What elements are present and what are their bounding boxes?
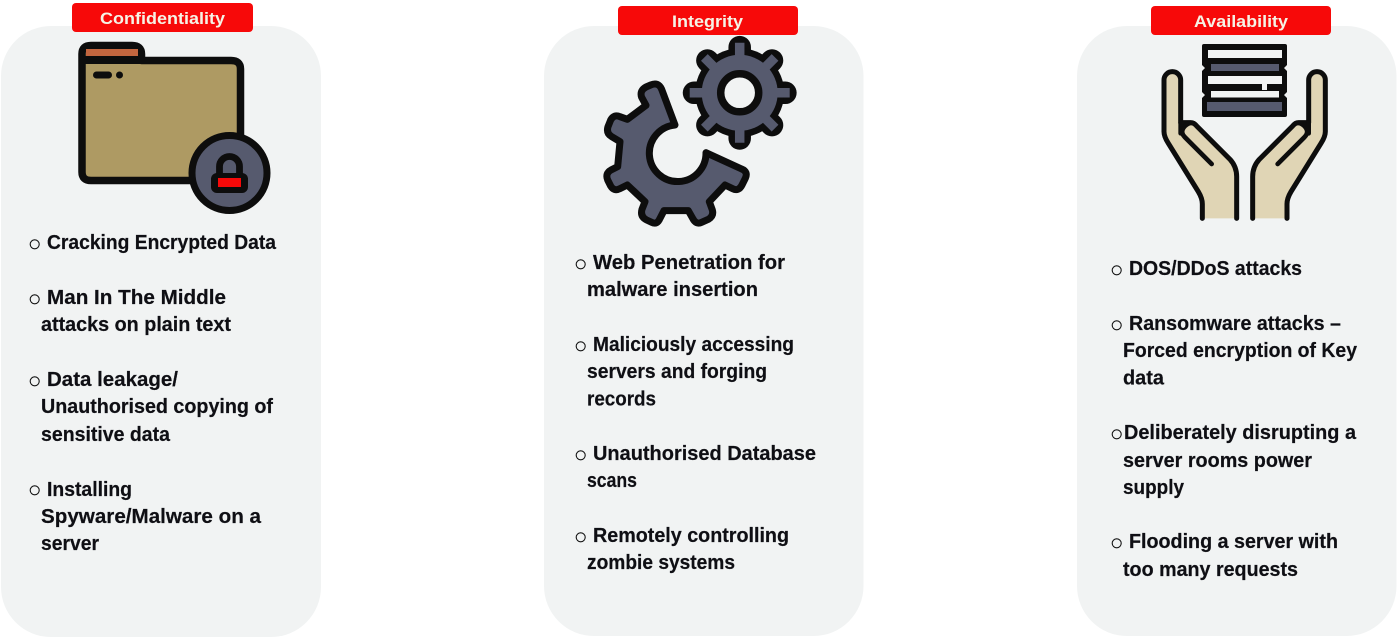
item: ransomware attacks: Forced encryption of Key xyxy=(1123,340,1358,362)
item: database scans: scans xyxy=(587,470,637,492)
item: zombie systems: Remotely controlling xyxy=(593,525,789,547)
item: ransomware attacks: Ransomware attacks – xyxy=(1129,313,1341,335)
list: confidentiality threats xyxy=(30,232,277,555)
item: disrupting power supply: server rooms power xyxy=(1123,450,1312,472)
item: web penetration: Web Penetration for xyxy=(593,252,785,274)
item: man in the middle: attacks on plain text xyxy=(41,314,231,336)
list: availability threats xyxy=(1112,258,1358,581)
item: installing spyware xyxy=(30,479,262,555)
heading: Confidentiality: Confidentiality xyxy=(100,9,226,28)
item: cracking encrypted data: Cracking Encrypted Data xyxy=(47,232,277,254)
item: ransomware attacks xyxy=(1112,313,1358,390)
item: database scans xyxy=(576,443,816,492)
icon: left hand xyxy=(1164,72,1237,218)
item: installing spyware: Installing xyxy=(47,479,132,501)
item: data leakage: Data leakage/ xyxy=(47,369,178,391)
item: zombie systems: zombie systems xyxy=(587,552,735,574)
heading: Integrity xyxy=(618,6,798,35)
item: maliciously accessing: servers and forging xyxy=(587,361,767,383)
item: installing spyware: server xyxy=(41,533,99,555)
item: database scans: Unauthorised Database xyxy=(593,443,816,465)
list: integrity threats xyxy=(576,252,816,574)
icon: right hand xyxy=(1253,72,1325,218)
item: dos attacks: DOS/DDoS attacks xyxy=(1129,258,1302,280)
heading: Availability xyxy=(1151,6,1331,35)
item: maliciously accessing: Maliciously accessing xyxy=(593,334,794,356)
item: man in the middle xyxy=(30,287,231,336)
item: web penetration xyxy=(576,252,785,301)
panel background xyxy=(544,26,864,636)
item: web penetration: malware insertion xyxy=(587,279,758,301)
item: data leakage xyxy=(30,369,273,446)
item: data leakage: Unauthorised copying of xyxy=(41,396,273,418)
icon: hands holding server xyxy=(1164,44,1325,218)
item: ransomware attacks: data xyxy=(1123,368,1165,390)
icon: server stack xyxy=(1202,44,1287,117)
heading: Integrity: Integrity xyxy=(672,12,744,31)
heading: Availability: Availability xyxy=(1194,12,1289,31)
item: flooding a server: Flooding a server with xyxy=(1129,531,1338,553)
heading: Confidentiality xyxy=(72,3,253,32)
icon: locked folder xyxy=(80,46,267,210)
item: maliciously accessing: records xyxy=(587,388,656,410)
item: data leakage: sensitive data xyxy=(41,424,171,446)
panel: confidentiality xyxy=(1,3,321,637)
icon: large broken gear xyxy=(607,84,746,223)
panel: availability xyxy=(1077,6,1396,636)
item: installing spyware: Spyware/Malware on a xyxy=(41,506,262,528)
item: disrupting power supply: supply xyxy=(1123,477,1185,499)
item: man in the middle: Man In The Middle xyxy=(47,287,226,309)
panel background xyxy=(1077,26,1396,636)
item: zombie systems xyxy=(576,525,789,574)
icon: small gear xyxy=(690,43,790,143)
item: flooding a server xyxy=(1112,531,1338,581)
item: flooding a server: too many requests xyxy=(1123,559,1298,581)
item: disrupting power supply xyxy=(1112,422,1357,499)
panel: integrity xyxy=(544,6,864,636)
icon: gears xyxy=(607,43,790,223)
item: maliciously accessing xyxy=(576,334,794,410)
item: disrupting power supply: Deliberately disrupting a xyxy=(1124,422,1357,444)
panel background xyxy=(1,26,321,637)
